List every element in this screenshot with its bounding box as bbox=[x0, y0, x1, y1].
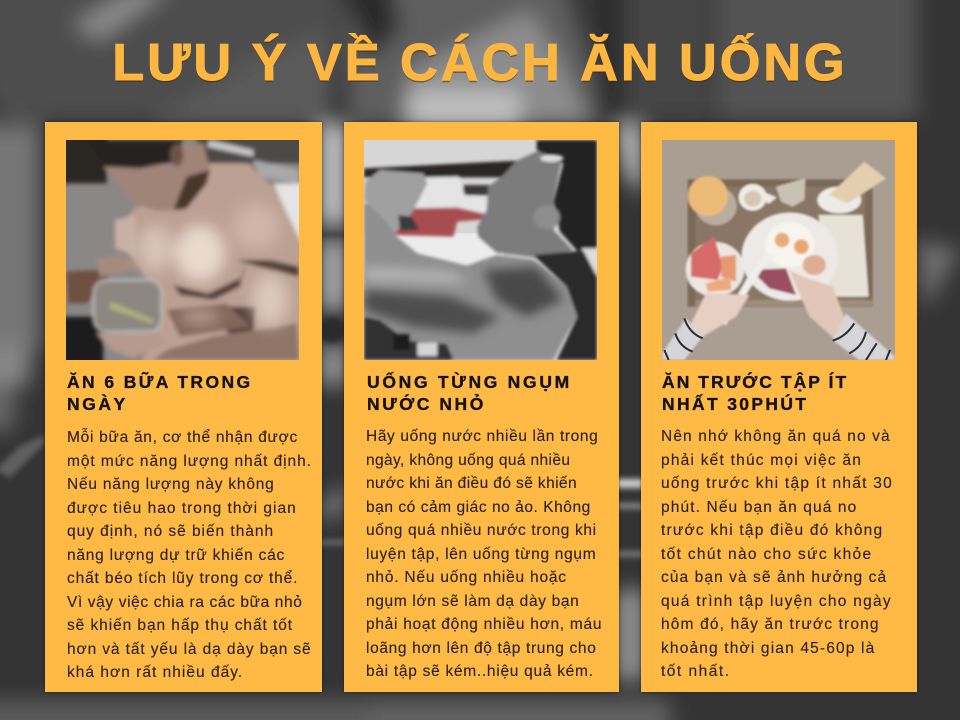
body text: ngụm lớn sẽ làm dạ dày bạn bbox=[366, 592, 579, 610]
body text: hơn và tất yếu là dạ dày bạn sẽ bbox=[67, 640, 312, 658]
panel: eat before training bbox=[641, 122, 917, 692]
body text: nước khi ăn điều đó sẽ khiến bbox=[366, 475, 577, 492]
body text: Nếu năng lượng này không bbox=[67, 476, 275, 493]
body text: uống quá nhiều nước trong khi bbox=[366, 522, 597, 539]
body text: quy định, nó sẽ biến thành bbox=[67, 523, 274, 540]
body text: sẽ khiến bạn hấp thụ chất tốt bbox=[67, 617, 293, 634]
body text: được tiêu hao trong thời gian bbox=[67, 500, 297, 516]
body text: uống trước khi tập ít nhất 30 bbox=[661, 475, 893, 492]
body text: của bạn và sẽ ảnh hưởng cả bbox=[661, 569, 887, 586]
body text: Hãy uống nước nhiều lần trong bbox=[366, 428, 598, 445]
panel: sip water bbox=[344, 122, 619, 692]
body text: Mỗi bữa ăn, cơ thể nhận được bbox=[67, 429, 298, 446]
body text: luyện tập, lên uống từng ngụm bbox=[366, 546, 596, 562]
body text: bạn có cảm giác no ảo. Không bbox=[366, 498, 591, 516]
heading bbox=[67, 372, 253, 414]
photo: athlete drinking from a bottle bbox=[364, 140, 597, 360]
body text: ngày, không uống quá nhiều bbox=[366, 452, 570, 468]
title: LƯU Ý VỀ CÁCH ĂN UỐNG bbox=[112, 34, 848, 92]
body text: khoảng thời gian 45-60p là bbox=[661, 640, 875, 656]
body text: trước khi tập điều đó không bbox=[661, 522, 883, 539]
heading bbox=[367, 372, 572, 414]
body text: khá hơn rất nhiều đấy. bbox=[67, 664, 243, 681]
body text bbox=[661, 428, 893, 680]
body text bbox=[67, 428, 312, 681]
heading: NGÀY bbox=[67, 394, 128, 414]
heading: NƯỚC NHỎ bbox=[367, 394, 486, 414]
body text: quá trình tập luyện cho ngày bbox=[661, 592, 892, 610]
heading: UỐNG TỪNG NGỤM bbox=[367, 372, 572, 392]
body text: năng lượng dự trữ khiến các bbox=[67, 546, 285, 564]
body text: phải kết thúc mọi việc ăn bbox=[661, 452, 862, 468]
panel: eat 6 meals bbox=[45, 122, 322, 692]
body text: phải hoạt động nhiều hơn, máu bbox=[366, 616, 602, 633]
body text: bài tập sẽ kém..hiệu quả kém. bbox=[366, 663, 594, 680]
body text: chất béo tích lũy trong cơ thể. bbox=[67, 570, 298, 587]
heading: NHẤT 30PHÚT bbox=[662, 394, 808, 414]
body text: loãng hơn lên độ tập trung cho bbox=[366, 640, 596, 656]
body text: một mức năng lượng nhất định. bbox=[67, 452, 312, 470]
body text: phút. Nếu bạn ăn quá no bbox=[661, 498, 857, 516]
body text: hôm đó, hãy ăn trước trong bbox=[661, 616, 880, 633]
body text: tốt chút nào cho sức khỏe bbox=[661, 546, 872, 562]
heading: ĂN TRƯỚC TẬP ÍT bbox=[662, 372, 848, 392]
heading: ĂN 6 BỮA TRONG bbox=[67, 372, 253, 392]
photo: breakfast tray on wooden table bbox=[662, 140, 895, 360]
body text: Nên nhớ không ăn quá no và bbox=[661, 428, 891, 445]
body text: tốt nhất. bbox=[661, 663, 731, 680]
photo: bodybuilder eating from a food container bbox=[66, 140, 299, 360]
body text: nhỏ. Nếu uống nhiều hoặc bbox=[366, 569, 567, 586]
body text: Vì vậy việc chia ra các bữa nhỏ bbox=[67, 594, 303, 610]
heading bbox=[662, 372, 848, 414]
body text bbox=[366, 428, 602, 680]
